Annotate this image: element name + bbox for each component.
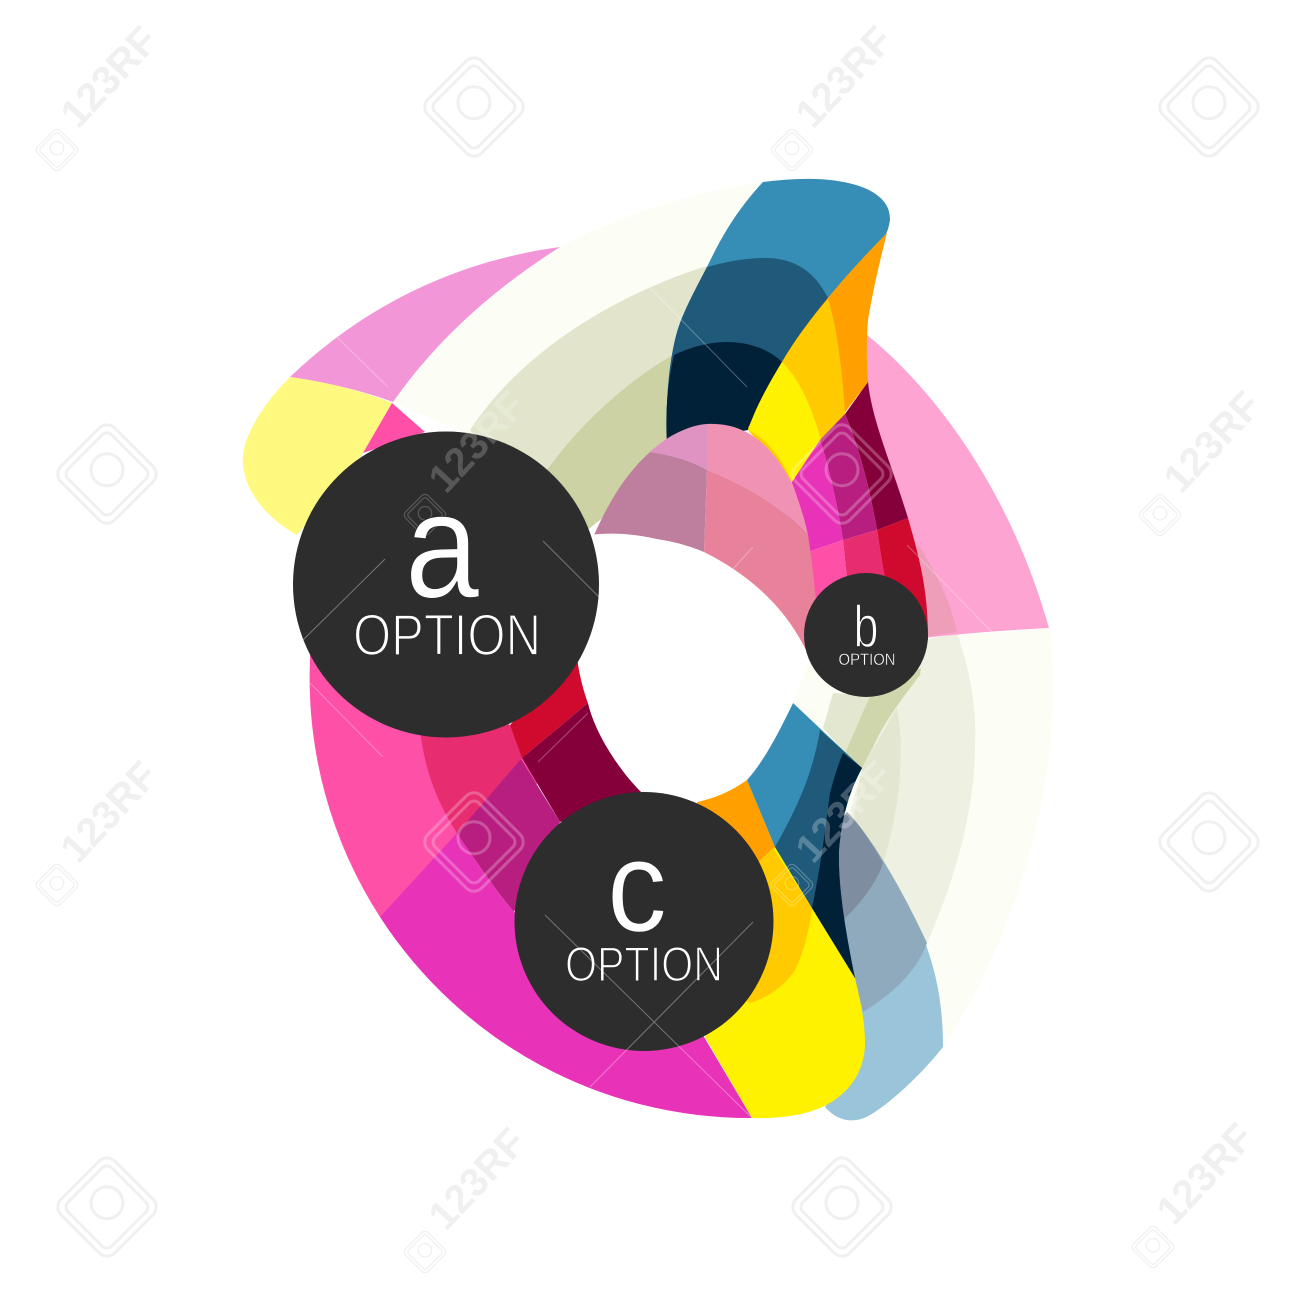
segment: top gold [748, 299, 845, 482]
segment: lower purple magenta [457, 759, 560, 912]
segment: darker grey blue overlap [820, 812, 883, 920]
segment: light olive strip [823, 693, 870, 753]
label a: OPTION [353, 603, 541, 668]
badge: option a [293, 383, 599, 738]
segment: lower navy [812, 753, 862, 978]
segment: lower gold [730, 848, 812, 1003]
band: dark olive arc [540, 355, 673, 540]
watermarks on white background: 123RF [420, 1120, 534, 1238]
segment: top blue [667, 179, 890, 440]
segment: mauve arch [590, 424, 820, 660]
segment: lower crimson [510, 655, 588, 758]
band: top cream arc [393, 182, 763, 520]
watermark on badge a [402, 383, 534, 538]
segment: top orange [748, 233, 887, 482]
label b: OPTION [838, 650, 896, 669]
segment: pale pink top left [290, 247, 560, 402]
letter b: b [854, 594, 878, 660]
segment: top dark blue [667, 258, 828, 440]
segment: crimson column [780, 382, 928, 640]
segment: lower left pink [310, 600, 540, 917]
watermark over lower right artwork [769, 753, 901, 908]
segment: right inner olive arc [843, 708, 901, 880]
segment: lower dark blue [775, 730, 862, 978]
segment: pink wedge [363, 403, 425, 453]
segment: top yellow [748, 362, 822, 482]
watermarks on white background: 123RF [1155, 383, 1269, 501]
letter a: a [405, 461, 479, 629]
hairline accents [310, 288, 992, 762]
segment: lower rose [420, 725, 522, 833]
watermark on badge a: 123RF [420, 383, 534, 501]
watermarks on white background: 123RF [1148, 1115, 1262, 1233]
badge: option b [804, 573, 928, 697]
segment: top navy [666, 342, 782, 445]
watermarks on white background: 123RF [787, 18, 901, 136]
segment: large pink right [860, 335, 1049, 638]
watermark over lower right artwork: 123RF [787, 753, 901, 871]
segment: right light olive arc [840, 633, 975, 943]
segment: pink right stripe [917, 543, 957, 637]
centre hole [577, 534, 810, 802]
letter c: c [607, 813, 667, 959]
ring chart shape [243, 179, 1053, 1120]
segment: lower orange [697, 780, 775, 870]
segment: pale yellow left [243, 377, 392, 535]
label c: OPTION [565, 938, 723, 992]
segment: right cream arc [793, 628, 1053, 1047]
watermarks on white background: 123RF [52, 753, 166, 871]
watermarks on white background: 123RF [52, 18, 166, 136]
segment: dark olive strip [845, 668, 921, 768]
segment: lower dark crimson [522, 703, 655, 822]
segment: grey blue tail overlap [820, 812, 927, 1012]
watermark stamps over artwork [420, 420, 896, 896]
band: light olive arc [470, 266, 708, 520]
badge: option c [514, 792, 774, 1051]
segment: light blue tail [820, 812, 943, 1120]
segment: lower magenta [380, 833, 752, 1118]
segment: lower yellow [700, 845, 865, 1118]
segment: lower blue [747, 703, 862, 978]
badge hairlines [303, 541, 753, 1118]
